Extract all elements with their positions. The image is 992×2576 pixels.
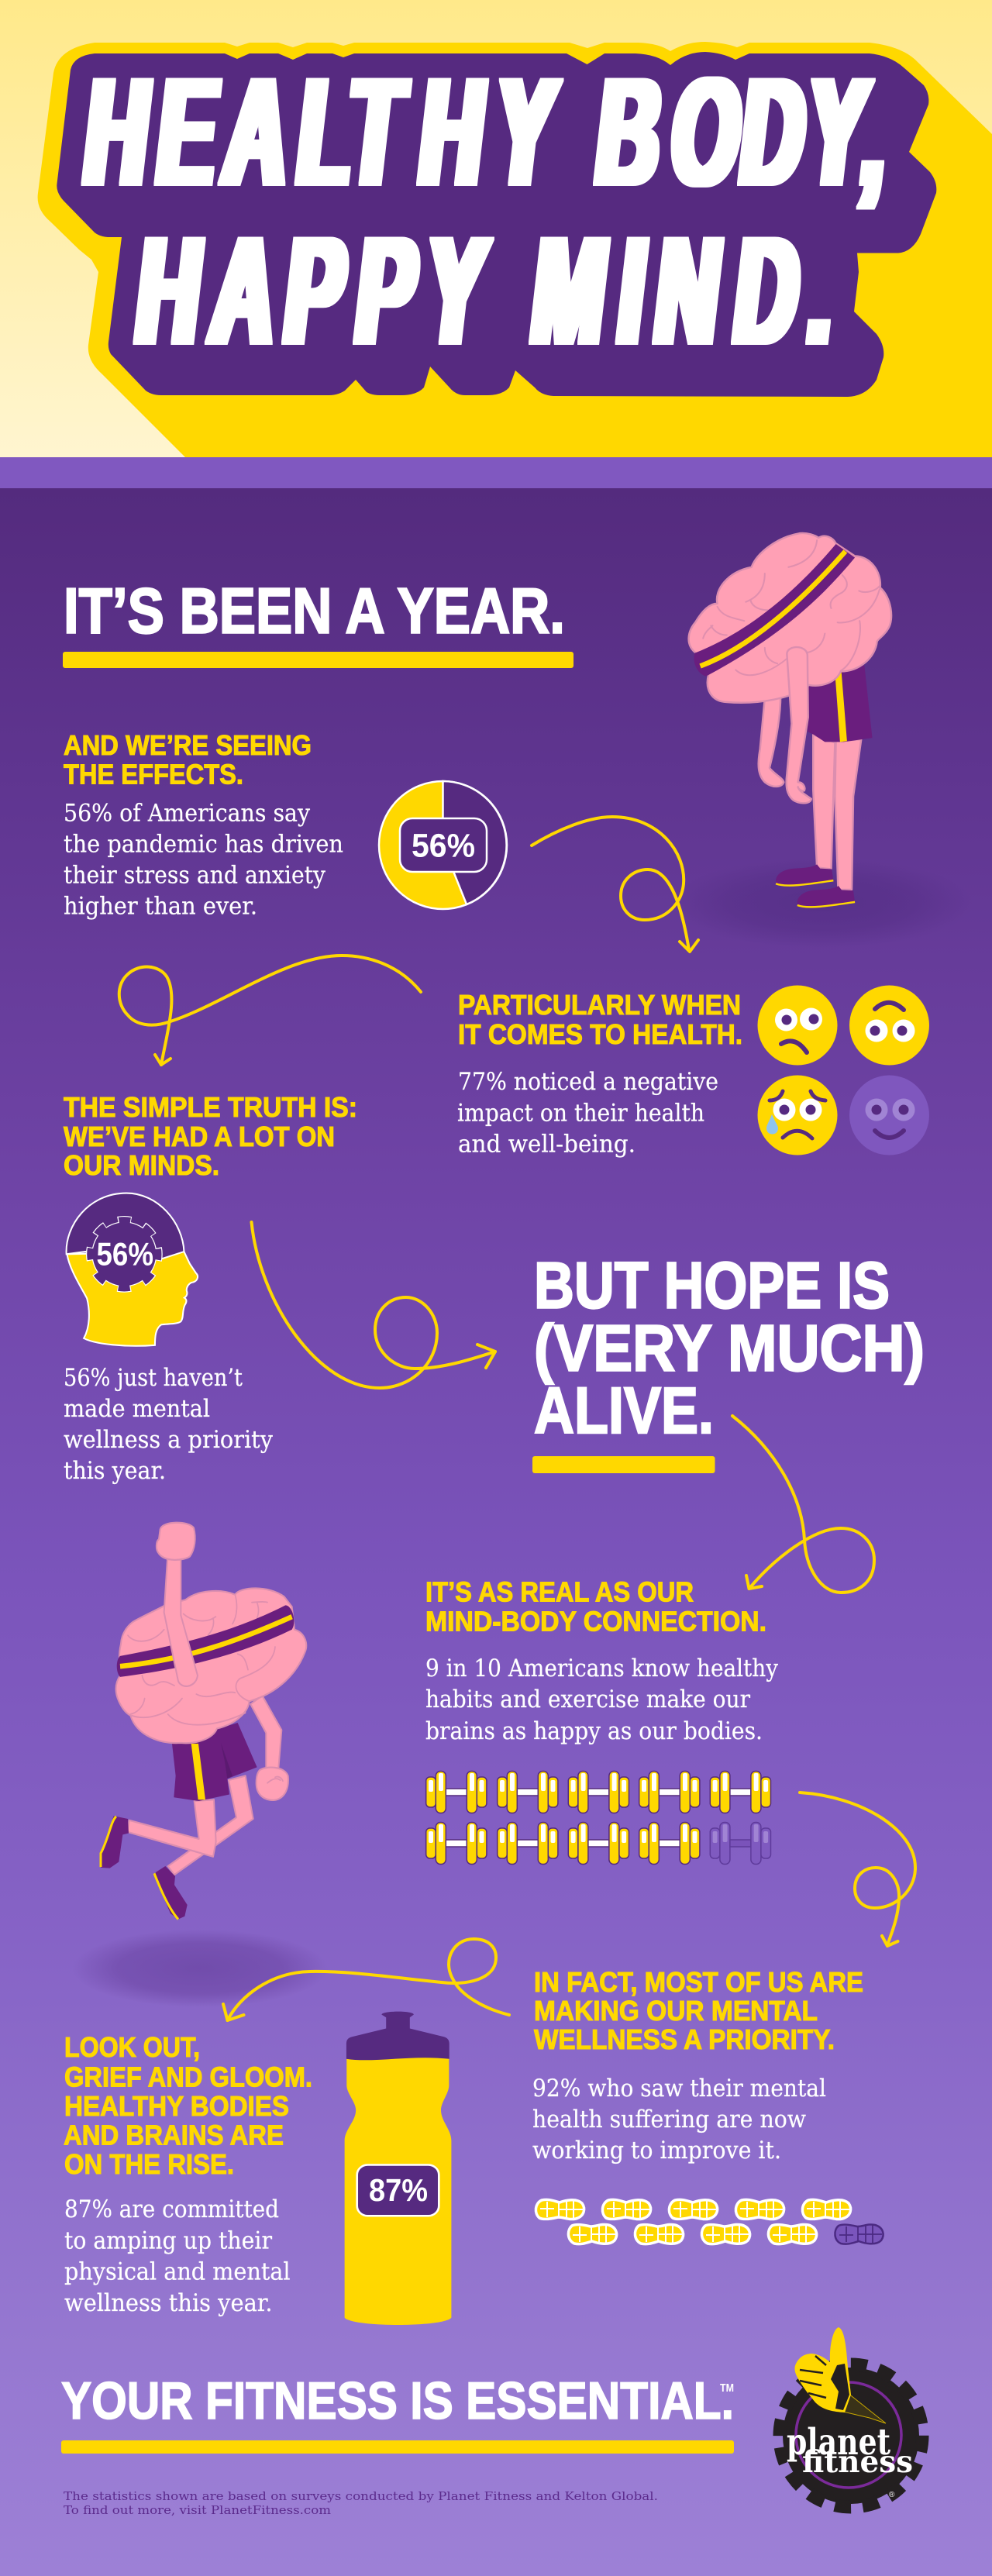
line 2: (VERY MUCH) [534,1311,925,1384]
section: particularly when it comes to health [457,989,742,1159]
section: most of us are making mental wellness a priority [532,1966,863,2164]
fist fold [267,1777,283,1783]
trademark: TM [720,2381,734,2395]
line 3: ALIVE. [534,1374,714,1447]
heading line 2: MIND-BODY CONNECTION. [425,1605,766,1637]
heading line 2: WE’VE HAD A LOT ON [64,1121,335,1152]
shoe front sole [101,1817,116,1867]
heading line 1: IN FACT, MOST OF US ARE [534,1966,863,1998]
bottle cap [346,2012,450,2060]
face: upside-down [849,986,929,1065]
head lower yellow [67,1252,198,1346]
logo hand shading [831,2364,849,2410]
heading line 1: IT’S AS REAL AS OUR [425,1576,694,1608]
shorts [808,665,873,742]
front arm [787,647,811,803]
tagline text: YOUR FITNESS IS ESSENTIAL. [61,2371,734,2430]
footnote line 2: To find out more, visit PlanetFitness.com [64,2503,331,2517]
shadow under jumping brain [72,1930,328,2007]
title line 2: HAPPY MIND. [129,205,845,376]
pie chart 56 percent [379,781,507,909]
footnote line 1: The statistics shown are based on surveys conducted by Planet Fitness and Kelton Global. [64,2489,658,2503]
logo registered mark: ® [889,2491,895,2499]
pie yellow share [379,781,507,909]
arrow: to look out [223,1939,509,2020]
right shoe sole [797,902,855,907]
line 2: made mental [64,1395,210,1423]
raised arm [164,1559,198,1686]
body line 1: 92% who saw their mental [532,2075,826,2102]
purple band [0,457,992,488]
pie label box [400,818,487,872]
heading: but hope is very much alive [534,1249,925,1447]
shoe back sole [154,1873,178,1919]
hope underline bar [532,1456,715,1473]
shadow under sad brain [670,858,973,948]
section: the simple truth [64,1091,357,1181]
pie purple share [443,781,507,904]
illustration: tired brain character [689,533,891,907]
headband stripe [701,551,846,666]
arrow: pie to faces [532,817,698,952]
logo ring [796,2382,901,2488]
title block [57,46,936,397]
heading line 3: WELLNESS A PRIORITY. [534,2023,835,2055]
arrow: faces to simple truth [119,956,421,1065]
face: happy, inactive [849,1076,929,1155]
bottle label text: 87% [369,2172,428,2208]
section: mind-body connection [425,1576,778,1745]
body: 56 percent just haven't [64,1364,273,1485]
shorts stripe [191,1744,205,1799]
title lettering [77,46,897,376]
body line 3: working to improve it. [532,2137,781,2164]
front leg [835,739,861,890]
brain folds [128,1595,275,1725]
title purple backing shape [57,52,936,397]
bottle label [357,2165,439,2216]
body line 3: brains as happy as our bodies. [425,1717,763,1745]
gear outline [91,1221,157,1286]
body line 1: 87% are committed [64,2195,279,2223]
headband [117,1605,294,1677]
heading: AND WE’RE SEEING [64,729,312,761]
body line 2: the pandemic has driven [64,831,343,859]
heading line 1: PARTICULARLY WHEN [458,989,741,1021]
logo gear [783,2368,919,2504]
brain [116,1589,306,1743]
line 3: wellness a priority [64,1426,273,1454]
icon: emoji faces [758,986,929,1155]
line 1: BUT HOPE IS [534,1249,890,1322]
front leg [127,1799,216,1857]
heading line 1: LOOK OUT, [64,2031,200,2063]
heading: it's been a year: IT’S BEEN A YEAR. [64,575,565,646]
raised fist [157,1523,195,1560]
pictogram: 9 of 10 footprints [536,2199,884,2244]
heading line 3: HEALTHY BODIES [64,2090,289,2122]
headband stripe [120,1617,292,1666]
shoe back [153,1866,188,1919]
heading underline bar [63,652,574,668]
body line 3: their stress and anxiety [64,862,326,890]
heading line 4: AND BRAINS ARE [64,2119,284,2151]
brain outline [689,533,891,703]
body line 4: wellness this year. [64,2289,273,2317]
header yellow extrusion shadow [38,42,992,457]
logo: planet fitness [780,2327,922,2507]
shorts [172,1723,257,1801]
heading line 2: MAKING OUR MENTAL [534,1995,818,2027]
body line 4: higher than ever. [64,893,257,921]
section: and we're seeing the effects [64,729,343,921]
shorts stripe [835,670,847,742]
logo word fitness: fitness [802,2444,913,2480]
arrow: dumbbells to priority [800,1793,915,1946]
brain folds [703,540,880,675]
header background [0,0,992,457]
line 4: this year. [64,1457,166,1485]
icon: water bottle 87 percent [345,2012,451,2325]
logo wrist [843,2393,886,2423]
body line 2: impact on their health [457,1100,704,1128]
heading line 1: THE SIMPLE TRUTH IS: [64,1091,357,1123]
heading line 2: IT COMES TO HEALTH. [458,1018,742,1050]
line 1: 56% just haven’t [64,1364,243,1392]
legs [813,735,835,869]
head upper purple [67,1193,184,1259]
footer tagline [61,2371,734,2430]
body line 1: 56% of Americans say [64,800,310,828]
icon: head with gear [67,1193,198,1346]
left shoe [776,864,833,886]
gear body [93,1223,156,1286]
back leg [168,1776,253,1875]
logo thumbs-up hand [794,2327,851,2412]
heading line 5: ON THE RISE. [64,2148,234,2180]
pictogram: 9 of 10 dumbbells [426,1772,770,1865]
face: crying [758,1076,837,1155]
body line 2: health suffering are now [532,2106,806,2133]
left shoe sole [776,880,833,886]
title line 1: HEALTHY BODY, [77,46,897,217]
body line 2: to amping up their [64,2226,272,2254]
bottle body [345,2058,451,2325]
footnote [64,2489,658,2517]
body line 3: and well-being. [458,1131,636,1159]
body line 2: habits and exercise make our [425,1686,750,1713]
body line 1: 9 in 10 Americans know healthy [425,1655,778,1682]
headband [694,544,855,677]
logo word planet: planet [787,2421,890,2464]
section: look out grief and gloom [64,2031,312,2317]
shoe front [101,1816,129,1868]
gear label: 56% [96,1236,153,1273]
heading line 3: OUR MINDS. [64,1149,219,1181]
face: worried [758,986,837,1065]
right arm [250,1696,281,1768]
body line 3: physical and mental [64,2257,291,2285]
back arm [759,695,784,787]
pie label: 56% [412,828,475,865]
arrow: to but hope is [251,1222,495,1388]
body line 1: 77% noticed a negative [458,1068,718,1096]
footer underline bar [61,2440,734,2454]
arrow: hope to connection [732,1416,874,1593]
heading line 2: GRIEF AND GLOOM. [64,2061,312,2092]
right fist [257,1768,288,1800]
right shoe [797,886,855,907]
shorts fold [221,1743,232,1779]
heading line 2: THE EFFECTS. [64,758,243,790]
illustration: jumping brain character [101,1523,306,1919]
logo finger creases [800,2356,826,2398]
